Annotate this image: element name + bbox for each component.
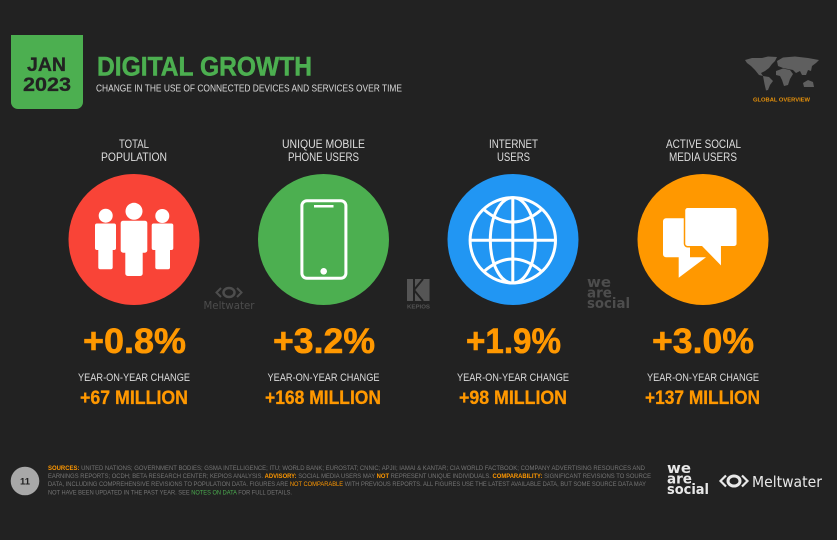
heading: internet — [489, 137, 539, 164]
watermark: meltwater: Meltwater — [204, 300, 255, 312]
footnote: DATA, INCLUDING COMPREHENSIVE REVISIONS TO POPULATION DATA. FIGURES ARE NOT COMPARABLE WITH PREVIOUS REPORTS. ALL FIGURES USE THE LATEST AVAILABLE DATA, BUT SOME SOURCE DATA MAY — [48, 481, 647, 488]
date badge: 2023 — [23, 75, 71, 96]
caption: year on year: YEAR-ON-YEAR CHANGE — [457, 372, 569, 384]
watermark: we are social: social — [587, 296, 630, 312]
footnote — [48, 465, 652, 496]
caption: year on year: YEAR-ON-YEAR CHANGE — [647, 372, 759, 384]
icon: mobile phone — [258, 174, 389, 305]
title: DIGITAL GROWTH — [97, 52, 312, 82]
watermark: we are social: we — [587, 275, 611, 291]
logo: we are social: we — [667, 461, 691, 477]
absolute change: +137 MILLION — [645, 388, 760, 409]
panel: unique mobile phone users — [258, 137, 389, 409]
heading: internet: INTERNET — [489, 137, 539, 151]
value: mobile change: +3.2% — [273, 321, 375, 361]
watermark: meltwater — [204, 288, 255, 312]
map caption: GLOBAL OVERVIEW — [753, 98, 811, 104]
logo: we are social: are — [667, 472, 692, 488]
panel: total population — [68, 137, 200, 409]
logo: we are social: social — [667, 482, 709, 498]
subtitle: CHANGE IN THE USE OF CONNECTED DEVICES AND SERVICES OVER TIME — [96, 84, 402, 94]
absolute change: +67 MILLION — [80, 388, 188, 409]
icon: speech bubbles — [638, 174, 768, 305]
panel: active social media users — [638, 137, 768, 409]
heading: total population: TOTAL — [119, 137, 149, 151]
page number — [11, 467, 39, 495]
icon: globe — [448, 174, 578, 305]
watermark: we are social — [587, 275, 630, 312]
heading: mobile: UNIQUE MOBILE — [282, 137, 365, 151]
logo: we are social — [667, 461, 709, 498]
watermark: kepios — [407, 279, 430, 310]
value: internet change: +1.9% — [466, 321, 561, 361]
footnote: EARNINGS REPORTS; OCDH; BETA RESEARCH CENTER; KEPIOS ANALYSIS. ADVISORY: SOCIAL MEDIA USERS MAY NOT REPRESENT UNIQUE INDIVIDUALS. COMPARABILITY: SIGNIFICANT REVISIONS TO SOURCE — [48, 473, 652, 480]
absolute change: +168 MILLION — [265, 388, 381, 409]
watermark: we are social: are — [587, 286, 612, 302]
absolute change: +98 MILLION — [459, 388, 567, 409]
icon: people — [68, 174, 200, 305]
logo: meltwater: Meltwater — [752, 473, 823, 491]
heading: total population — [101, 137, 167, 164]
value: population change: +0.8% — [83, 321, 186, 361]
heading: total population: POPULATION — [101, 150, 167, 164]
heading: mobile: PHONE USERS — [288, 150, 359, 164]
heading: social: MEDIA USERS — [669, 150, 737, 164]
page number: 11 — [20, 476, 31, 488]
date badge — [11, 35, 83, 109]
footnote: NOT HAVE BEEN UPDATED IN THE PAST YEAR. SEE NOTES ON DATA FOR FULL DETAILS. — [48, 490, 292, 496]
heading: social — [666, 137, 741, 164]
logo: meltwater — [720, 473, 823, 491]
caption: year on year: YEAR-ON-YEAR CHANGE — [78, 372, 190, 384]
watermark: kepios: KEPIOS — [407, 304, 430, 310]
heading: social: ACTIVE SOCIAL — [666, 137, 741, 151]
panel: internet users — [448, 137, 578, 409]
icon: world map — [745, 56, 819, 90]
date badge: JAN — [27, 55, 66, 76]
caption: year on year: YEAR-ON-YEAR CHANGE — [268, 372, 380, 384]
footnote: SOURCES: UNITED NATIONS; GOVERNMENT BODIES; GSMA INTELLIGENCE; ITU; WORLD BANK; EUROSTAT; CNNIC; APJII; IAMAI & KANTAR; CIA WORLD FACTBOOK; COMPANY ADVERTISING RESOURCES AND — [48, 465, 645, 472]
heading: internet: USERS — [497, 150, 530, 164]
value: social change: +3.0% — [652, 321, 754, 361]
heading: mobile — [282, 137, 365, 164]
